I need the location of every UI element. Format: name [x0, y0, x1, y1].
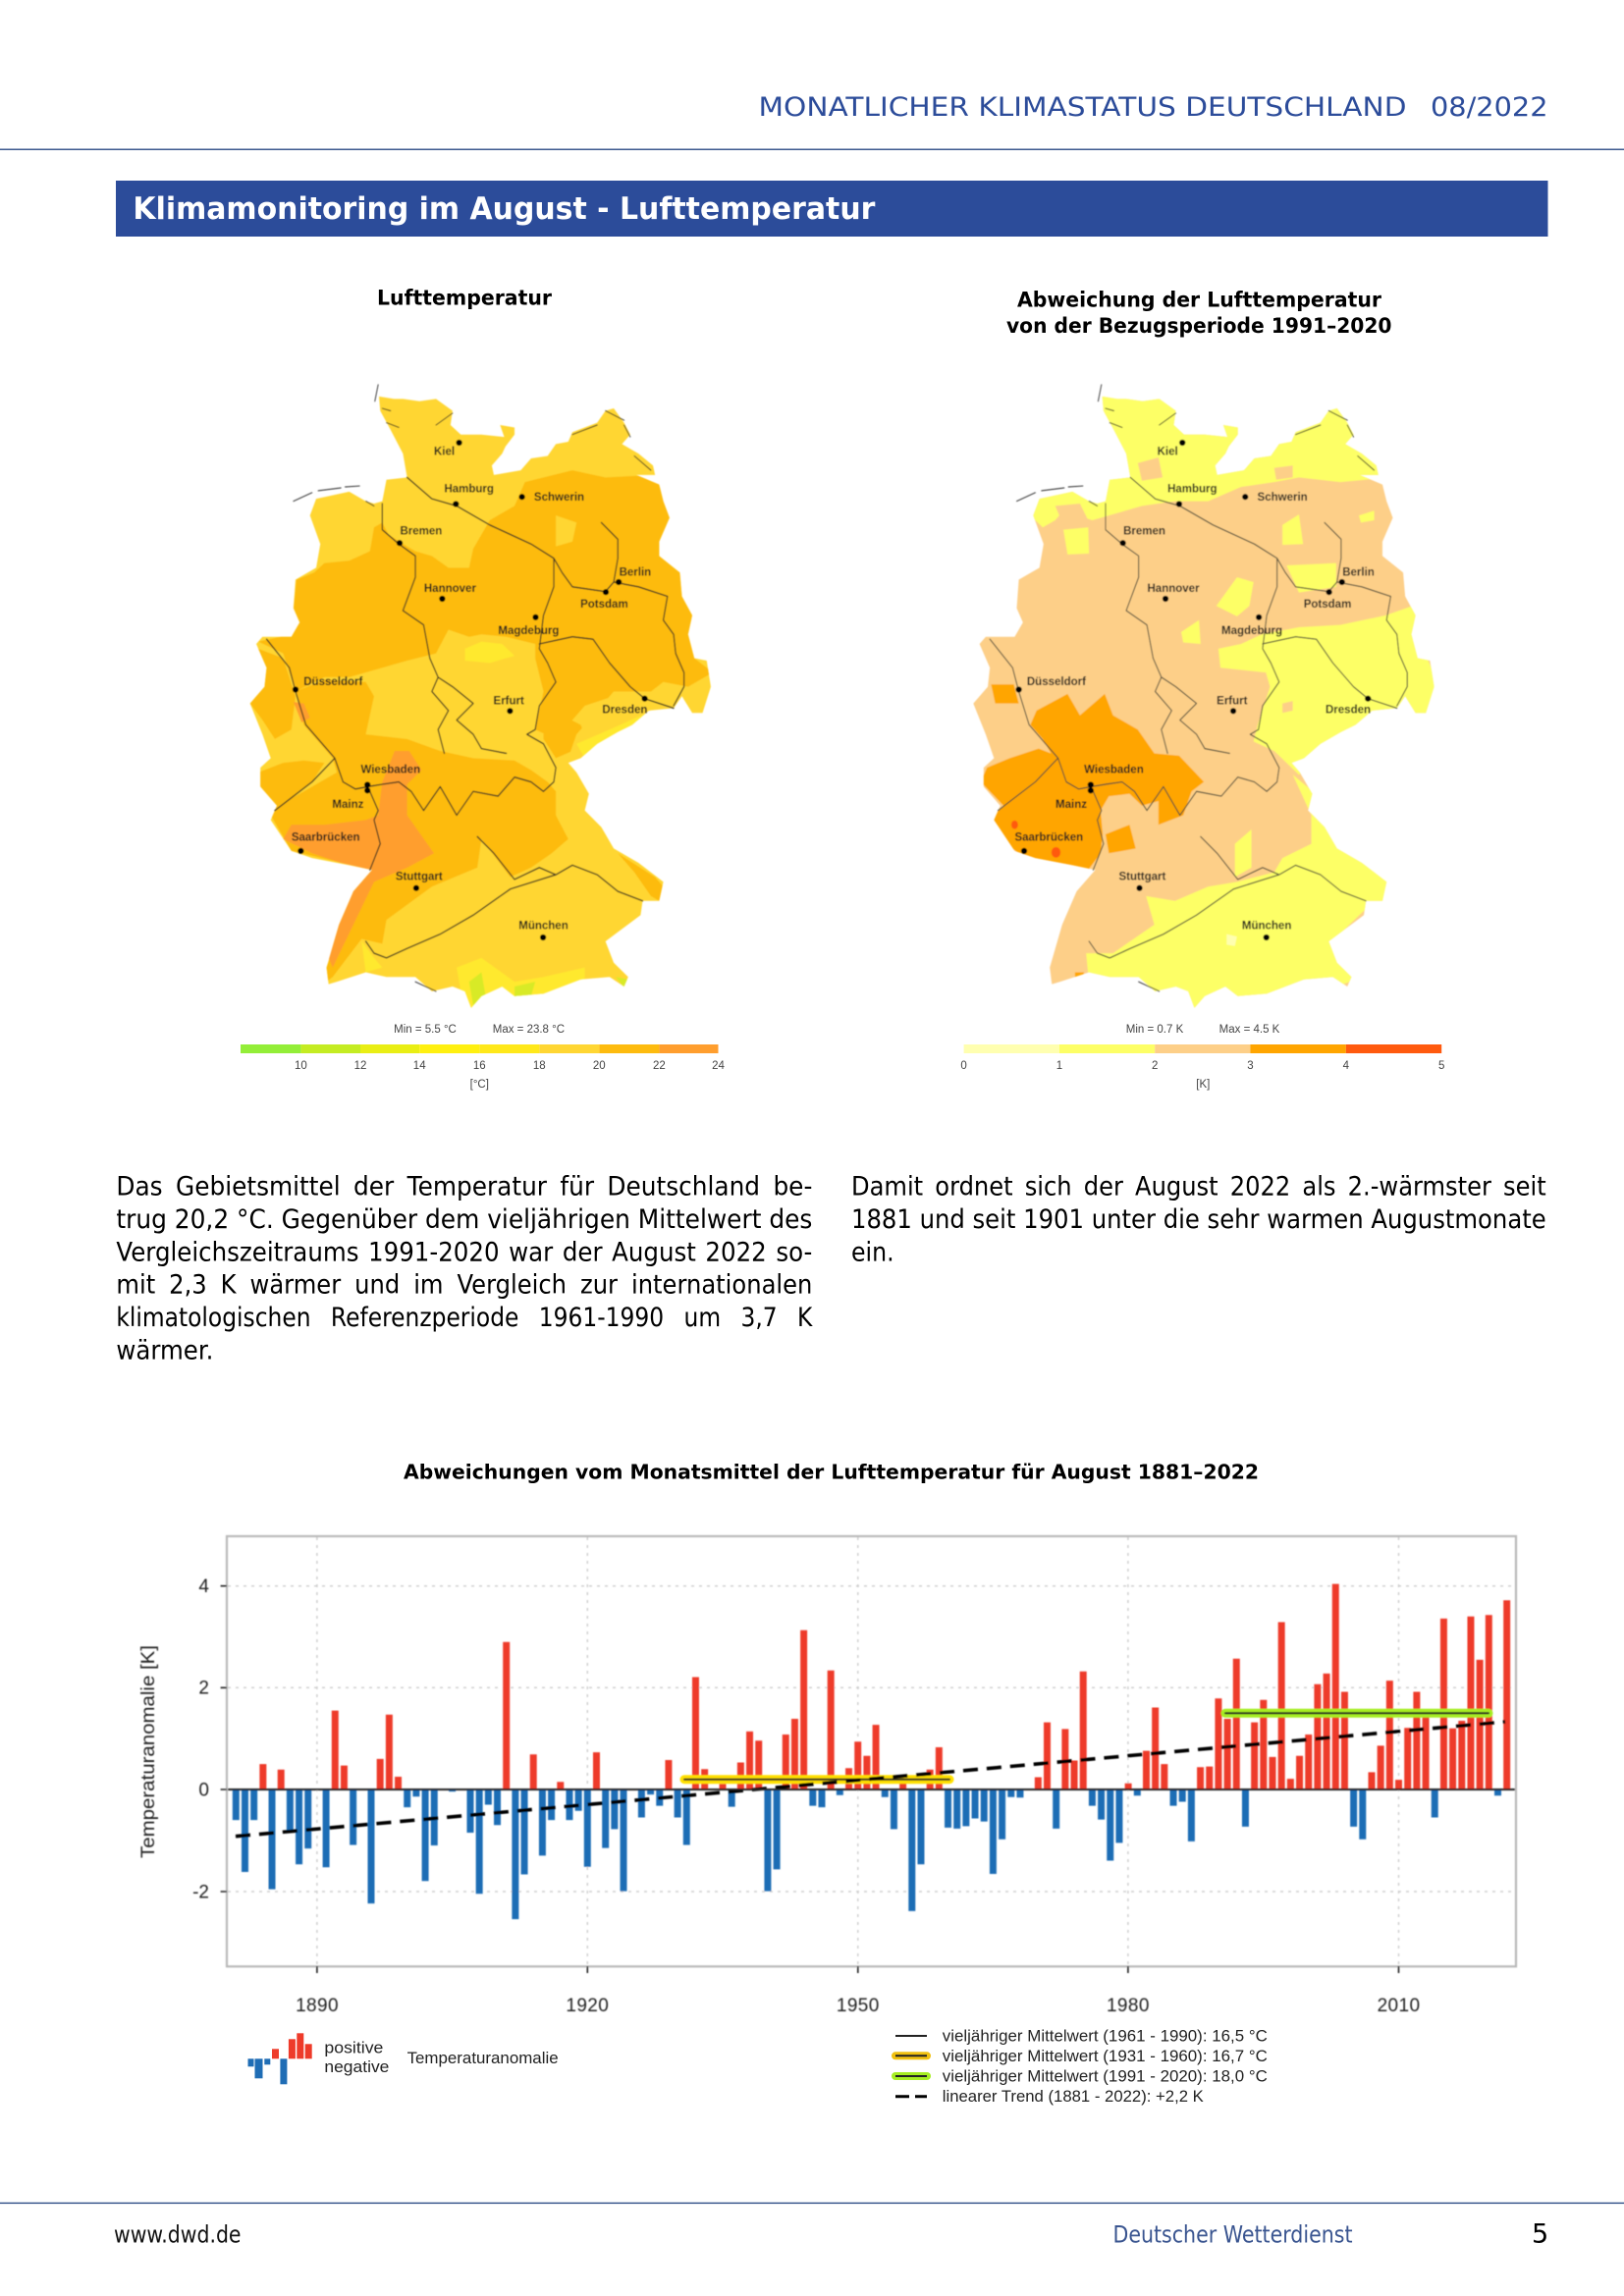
chart legend: mean lines and trend: vieljähriger Mittelwert (1991 - 2020): 18,0 °C: [943, 2067, 1268, 2085]
city markers and labels left: Mainz: [332, 799, 364, 811]
y axis labels: [192, 1576, 209, 1902]
page header title: 08/2022: [1431, 92, 1547, 123]
chart legend: mean lines and trend: [895, 2026, 1268, 2106]
city markers and labels left: Saarbrücken: [292, 832, 360, 844]
city markers and labels left: Potsdam: [580, 599, 628, 611]
bar chart: temperature anomalies 1881-2022: [138, 1536, 1516, 2016]
city markers and labels left: Erfurt: [494, 695, 524, 707]
city markers and labels left: Stuttgart: [396, 872, 443, 883]
city markers and labels left: Magdeburg: [498, 625, 559, 637]
colour legend left map: 16: [473, 1060, 486, 1072]
text block right: [851, 1171, 1546, 1267]
city markers and labels right: Potsdam: [1304, 599, 1351, 611]
text block right: Damit ordnet sich der August 2022 als 2.-wärmster seit: [851, 1171, 1546, 1201]
x axis labels: 1920: [566, 1996, 609, 2016]
plot frame: [227, 1536, 1516, 1966]
colour legend left map: [241, 1024, 725, 1091]
city markers and labels right: Stuttgart: [1118, 872, 1166, 883]
footer organisation: Deutscher Wetterdienst: [1113, 2220, 1353, 2248]
map: temperature anomaly Germany: [965, 378, 1440, 1015]
colour legend left map: Max = 23.8 °C: [493, 1024, 565, 1036]
map: air temperature Germany: [242, 378, 717, 1015]
mean line 1991-2020: [1225, 1709, 1489, 1718]
x axis labels: [296, 1996, 1420, 2016]
positive bars: [259, 1584, 1510, 1789]
city markers and labels right: Bremen: [1123, 526, 1165, 538]
x axis labels: 1950: [837, 1996, 880, 2016]
text block left: wärmer.: [116, 1335, 213, 1365]
city markers and labels left: Dresden: [602, 705, 647, 717]
text block left: Das Gebietsmittel der Temperatur für Deutschland be-: [116, 1171, 812, 1201]
city markers and labels left: [292, 440, 651, 940]
text block right: ein.: [851, 1237, 894, 1267]
chart legend: mean lines and trend: linearer Trend (1881 - 2022): +2,2 K: [943, 2087, 1204, 2106]
y axis labels: 0: [198, 1781, 209, 1800]
text block left: Vergleichszeitraums 1991-2020 war der August 2022 so-: [116, 1237, 812, 1267]
chart legend: anomaly bars: negative: [324, 2057, 389, 2076]
city markers and labels left: Hannover: [424, 583, 476, 595]
section heading banner: Klimamonitoring im August - Lufttemperatur: [133, 191, 876, 227]
city markers and labels left: Kiel: [434, 447, 455, 458]
colour legend right map: Max = 4.5 K: [1219, 1024, 1280, 1036]
chart legend: mean lines and trend: vieljähriger Mittelwert (1961 - 1990): 16,5 °C: [943, 2026, 1268, 2046]
city markers and labels right: Berlin: [1342, 567, 1375, 579]
chart legend: anomaly bars: Temperaturanomalie: [407, 2049, 559, 2067]
text block left: mit 2,3 K wärmer und im Vergleich zur internationalen: [116, 1270, 812, 1301]
colour legend left map: 10: [295, 1060, 307, 1072]
city markers and labels right: Kiel: [1158, 447, 1178, 458]
city markers and labels right: München: [1242, 921, 1291, 933]
city markers and labels left: Berlin: [620, 567, 651, 579]
colour legend left map: 24: [712, 1060, 725, 1072]
city markers and labels left: Bremen: [400, 526, 442, 538]
mean line 1931-1960: [684, 1775, 949, 1784]
colour legend left map: 18: [533, 1060, 546, 1072]
city markers and labels left: Düsseldorf: [303, 676, 362, 688]
city markers and labels left: München: [518, 921, 568, 933]
y axis labels: 2: [198, 1679, 209, 1698]
colour legend right map: 4: [1343, 1060, 1350, 1072]
colour legend right map: Min = 0.7 K: [1126, 1024, 1184, 1036]
chart legend: mean lines and trend: vieljähriger Mittelwert (1931 - 1960): 16,7 °C: [943, 2047, 1268, 2065]
colour legend left map: 12: [354, 1060, 366, 1072]
section heading banner: [116, 181, 1547, 237]
city markers and labels left: Hamburg: [444, 483, 494, 495]
city markers and labels right: Magdeburg: [1221, 625, 1282, 637]
chart legend: anomaly bars: [247, 2033, 559, 2084]
city markers and labels left: Wiesbaden: [360, 765, 420, 776]
text block left: klimatologischen Referenzperiode 1961-1990 um 3,7 K: [116, 1303, 814, 1333]
x axis labels: 1890: [296, 1996, 339, 2016]
x axis labels: 2010: [1378, 1996, 1420, 2016]
colour legend right map: [960, 1024, 1444, 1091]
text block right: 1881 und seit 1901 unter die sehr warmen Augustmonate: [851, 1204, 1546, 1235]
chart title: Abweichungen vom Monatsmittel der Lufttemperatur für August 1881–2022: [404, 1461, 1259, 1484]
right map title: [1006, 289, 1392, 338]
colour legend left map: Min = 5.5 °C: [394, 1024, 457, 1036]
text block left: trug 20,2 °C. Gegenüber dem vieljährigen Mittelwert des: [116, 1204, 812, 1235]
x axis labels: 1980: [1107, 1996, 1150, 2016]
y axis title: Temperaturanomalie [K]: [138, 1645, 159, 1858]
zero line: [227, 1789, 1516, 1790]
colour legend right map: [K]: [1196, 1079, 1210, 1091]
colour legend right map: 2: [1152, 1060, 1158, 1072]
colour legend right map: 0: [960, 1060, 967, 1072]
negative bars: [233, 1789, 1501, 1919]
city markers and labels left: Schwerin: [534, 492, 584, 504]
right map title: von der Bezugsperiode 1991–2020: [1006, 314, 1392, 338]
colour legend left map: 20: [593, 1060, 606, 1072]
y axis labels: 4: [198, 1576, 209, 1597]
city markers and labels right: Wiesbaden: [1084, 765, 1144, 776]
y axis labels: -2: [192, 1883, 209, 1902]
colour legend left map: 22: [653, 1060, 666, 1072]
colour legend right map: 1: [1056, 1060, 1062, 1072]
page header title: MONATLICHER KLIMASTATUS DEUTSCHLAND: [758, 92, 1406, 123]
page number: 5: [1532, 2218, 1548, 2249]
colour legend left map: 14: [413, 1060, 426, 1072]
colour legend left map: [°C]: [470, 1079, 489, 1091]
footer url: www.dwd.de: [114, 2220, 242, 2248]
city markers and labels right: Hamburg: [1167, 483, 1218, 495]
colour legend right map: 5: [1438, 1060, 1444, 1072]
city markers and labels right: Schwerin: [1258, 492, 1308, 504]
text block left: [116, 1171, 814, 1365]
city markers and labels right: [1014, 440, 1375, 940]
right map title: Abweichung der Lufttemperatur: [1017, 289, 1382, 312]
city markers and labels right: Düsseldorf: [1027, 676, 1086, 688]
left map title: Lufttemperatur: [377, 287, 553, 310]
city markers and labels right: Saarbrücken: [1014, 832, 1083, 844]
city markers and labels right: Hannover: [1148, 583, 1200, 595]
chart legend: anomaly bars: positive: [324, 2038, 383, 2057]
city markers and labels right: Dresden: [1326, 705, 1371, 717]
city markers and labels right: Mainz: [1056, 799, 1087, 811]
colour legend right map: 3: [1247, 1060, 1254, 1072]
city markers and labels right: Erfurt: [1217, 695, 1248, 707]
linear trend line: [236, 1722, 1505, 1837]
